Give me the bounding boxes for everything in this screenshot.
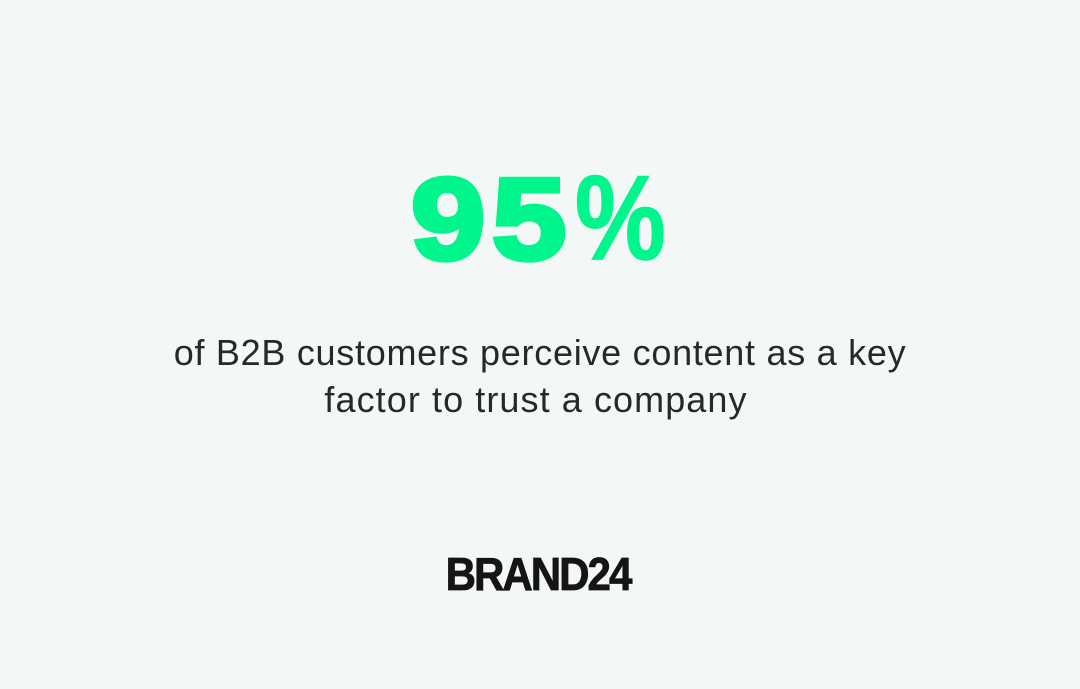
statistic: 95%: 9	[411, 154, 485, 284]
description text: factor to trust a company	[324, 378, 748, 420]
statistic: 95%: 5	[492, 154, 566, 284]
description text: of B2B customers perceive content as a key	[174, 332, 906, 373]
description text	[174, 332, 906, 420]
logo: BRAND24: BRAND24	[445, 548, 630, 600]
statistic: 95%: %	[575, 151, 666, 285]
statistic: 95%	[411, 151, 666, 285]
